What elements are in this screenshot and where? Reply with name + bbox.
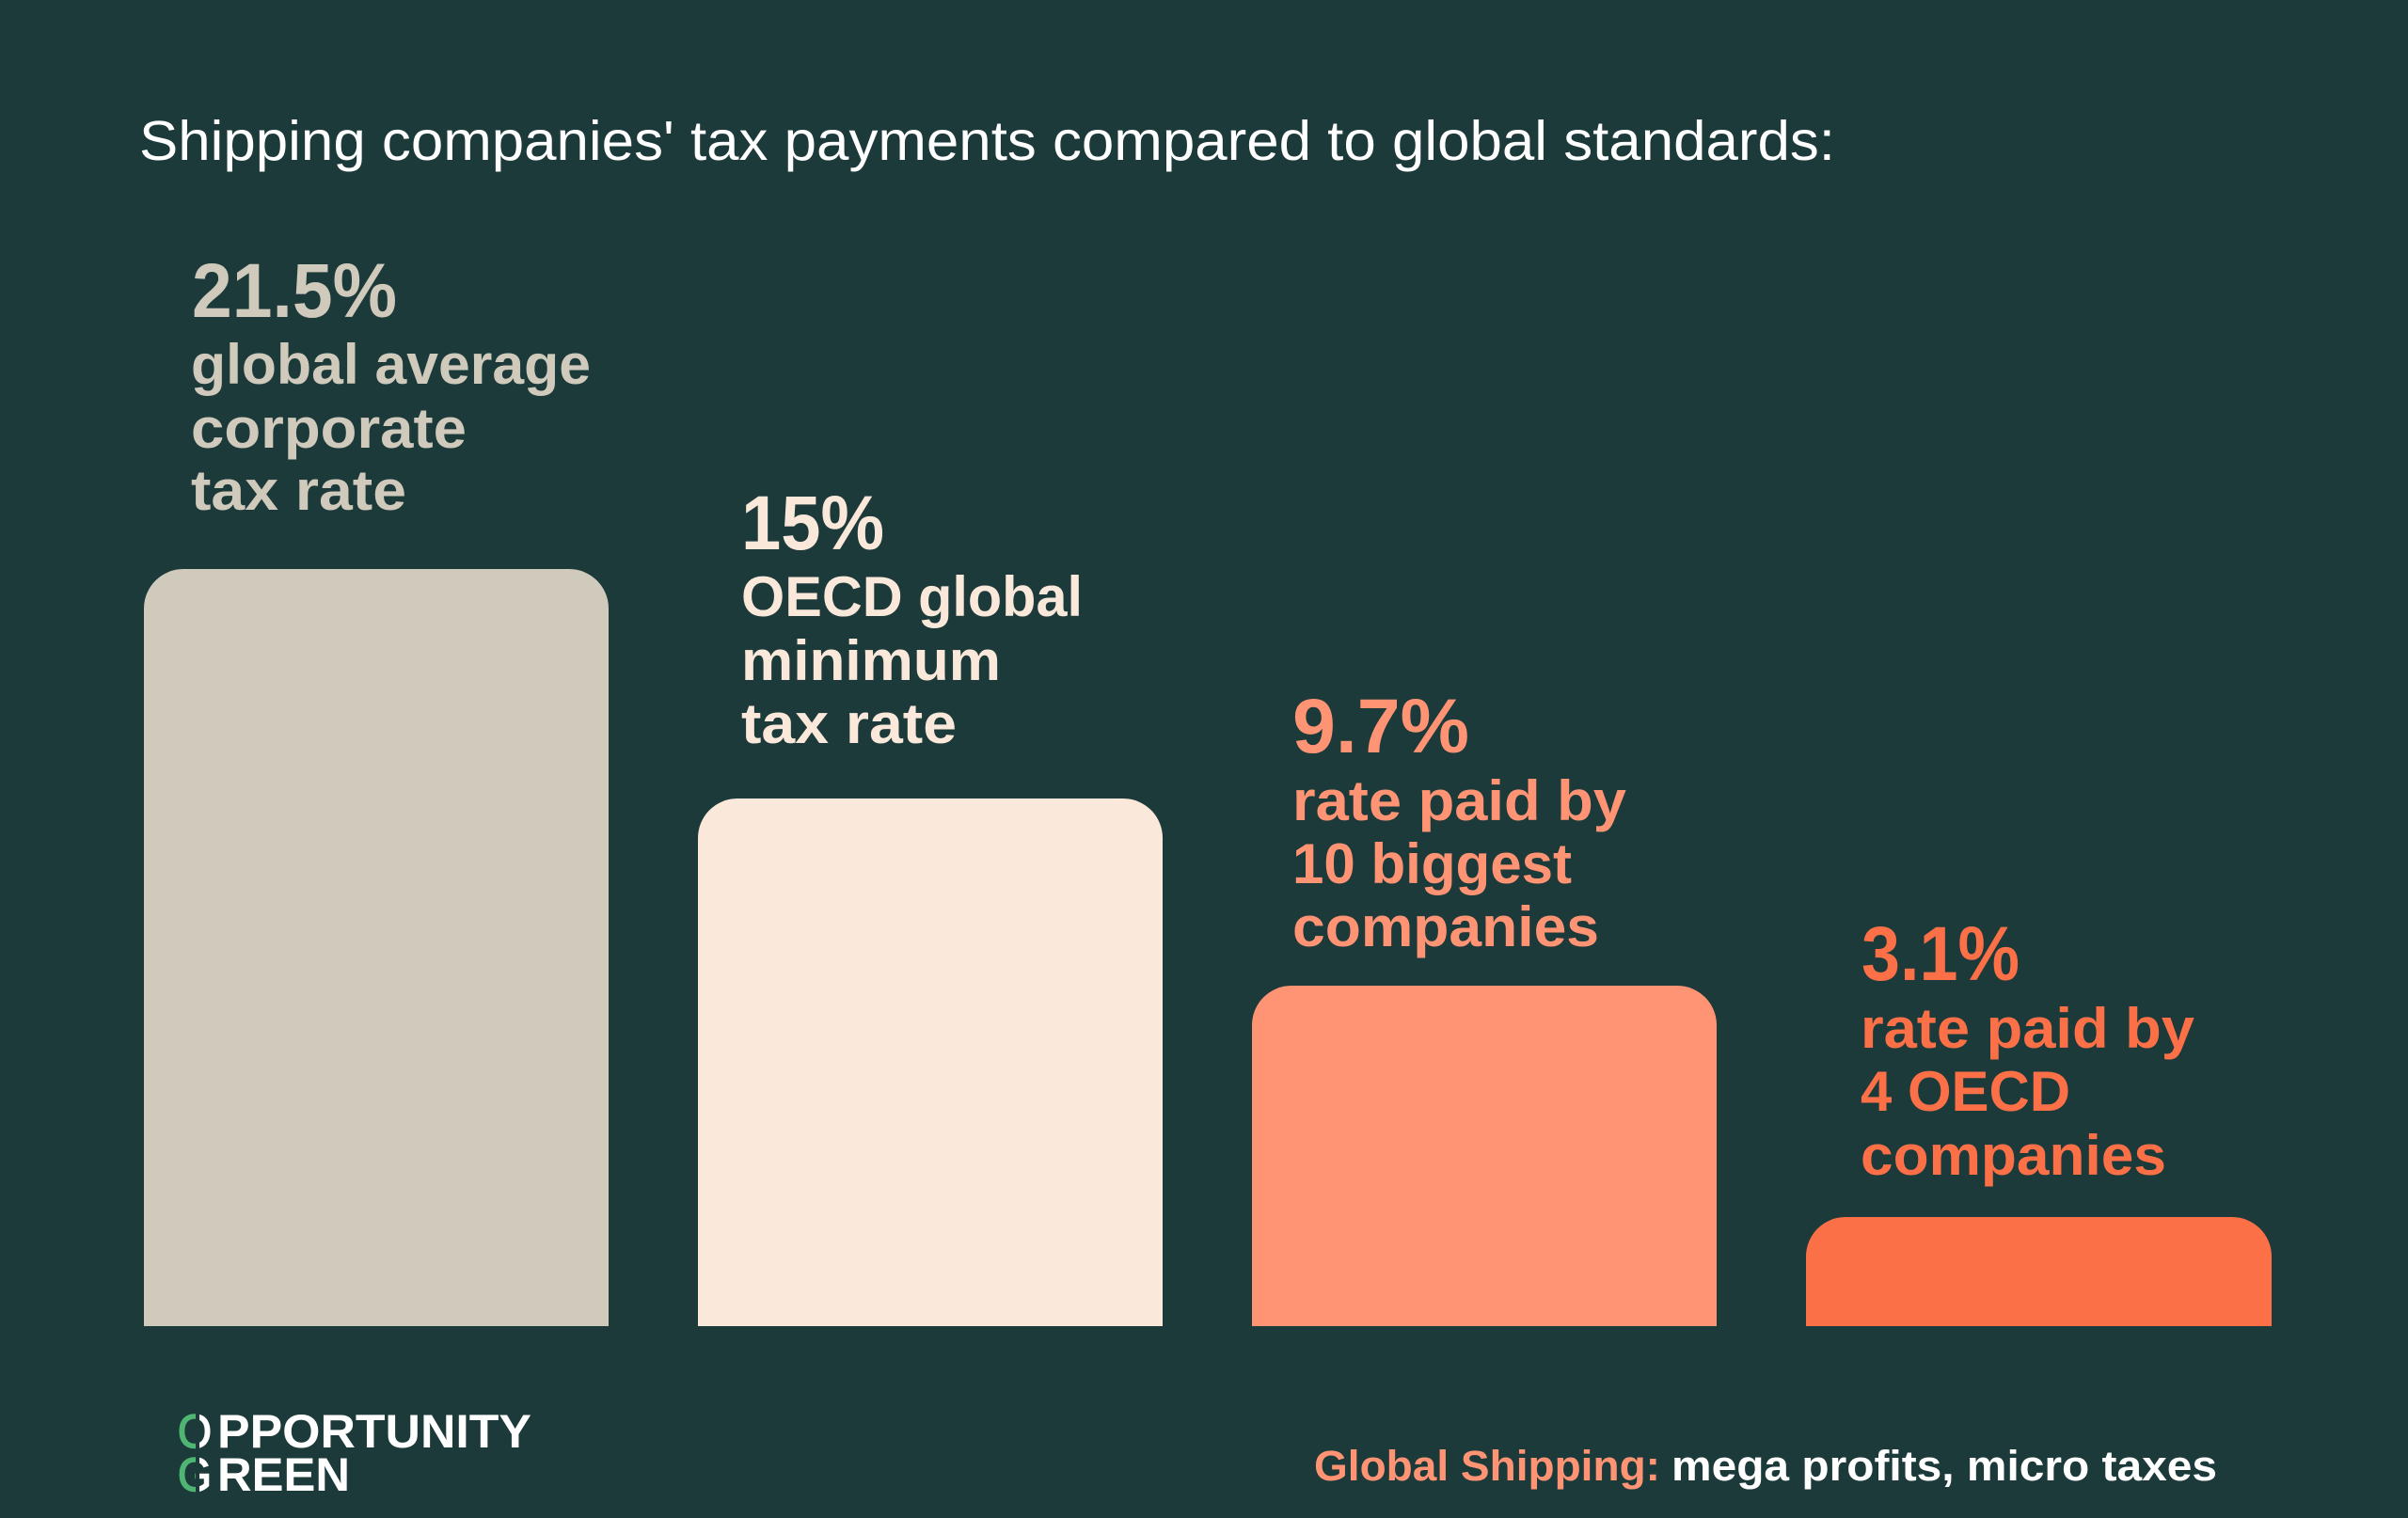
label: OECD global minimum tax rate: OECD global	[741, 565, 1083, 628]
label: OECD global minimum tax rate: tax rate	[741, 692, 957, 755]
label: rate paid by 10 biggest companies	[1292, 769, 1627, 958]
value: 3.1%: 3.1%	[1861, 911, 2020, 997]
bar: 15%	[698, 799, 1163, 1326]
bar group: OECD global minimum tax rate	[698, 481, 1163, 1326]
bar group: rate paid by 4 OECD companies	[1806, 911, 2272, 1326]
label: global average corporate tax rate: global average	[191, 333, 591, 396]
bar group: global average corporate tax rate	[144, 248, 609, 1326]
label: rate paid by 4 OECD companies: rate paid by	[1861, 997, 2195, 1060]
bar: 3.1%	[1806, 1217, 2272, 1326]
label: global average corporate tax rate	[191, 333, 591, 522]
logo: Opportunity Green: REEN	[217, 1448, 350, 1501]
value: 15%: 15%	[741, 481, 884, 566]
label: rate paid by 10 biggest companies: companies	[1292, 895, 1599, 958]
value: 21.5%: 21.5%	[192, 248, 397, 334]
label: global average corporate tax rate: tax rate	[191, 459, 406, 522]
bar: 21.5%	[144, 569, 609, 1326]
label: rate paid by 10 biggest companies: 10 biggest	[1292, 832, 1572, 895]
label: OECD global minimum tax rate: minimum	[741, 629, 1001, 692]
value: 9.7%: 9.7%	[1292, 684, 1469, 769]
logo: Opportunity Green: O	[178, 1405, 212, 1458]
logo: Opportunity Green: PPORTUNITY	[217, 1405, 531, 1458]
label: OECD global minimum tax rate	[741, 565, 1083, 755]
label: rate paid by 4 OECD companies: 4 OECD	[1861, 1060, 2070, 1123]
label: global average corporate tax rate: corporate	[191, 397, 467, 460]
bar group: rate paid by 10 biggest companies	[1252, 684, 1717, 1326]
footer tagline: mega profits, micro taxes	[1671, 1442, 2217, 1490]
logo: Opportunity Green	[178, 1405, 531, 1501]
footer tagline	[1314, 1442, 2217, 1490]
logo: Opportunity Green: G	[178, 1448, 212, 1501]
label: rate paid by 10 biggest companies: rate paid by	[1292, 769, 1627, 832]
bar: 9.7%	[1252, 986, 1717, 1326]
label: rate paid by 4 OECD companies: companies	[1861, 1124, 2166, 1187]
footer tagline: Global Shipping:	[1314, 1442, 1660, 1490]
title: Shipping companies' tax payments compared to global standards:	[139, 110, 1835, 172]
label: rate paid by 4 OECD companies	[1861, 997, 2195, 1187]
